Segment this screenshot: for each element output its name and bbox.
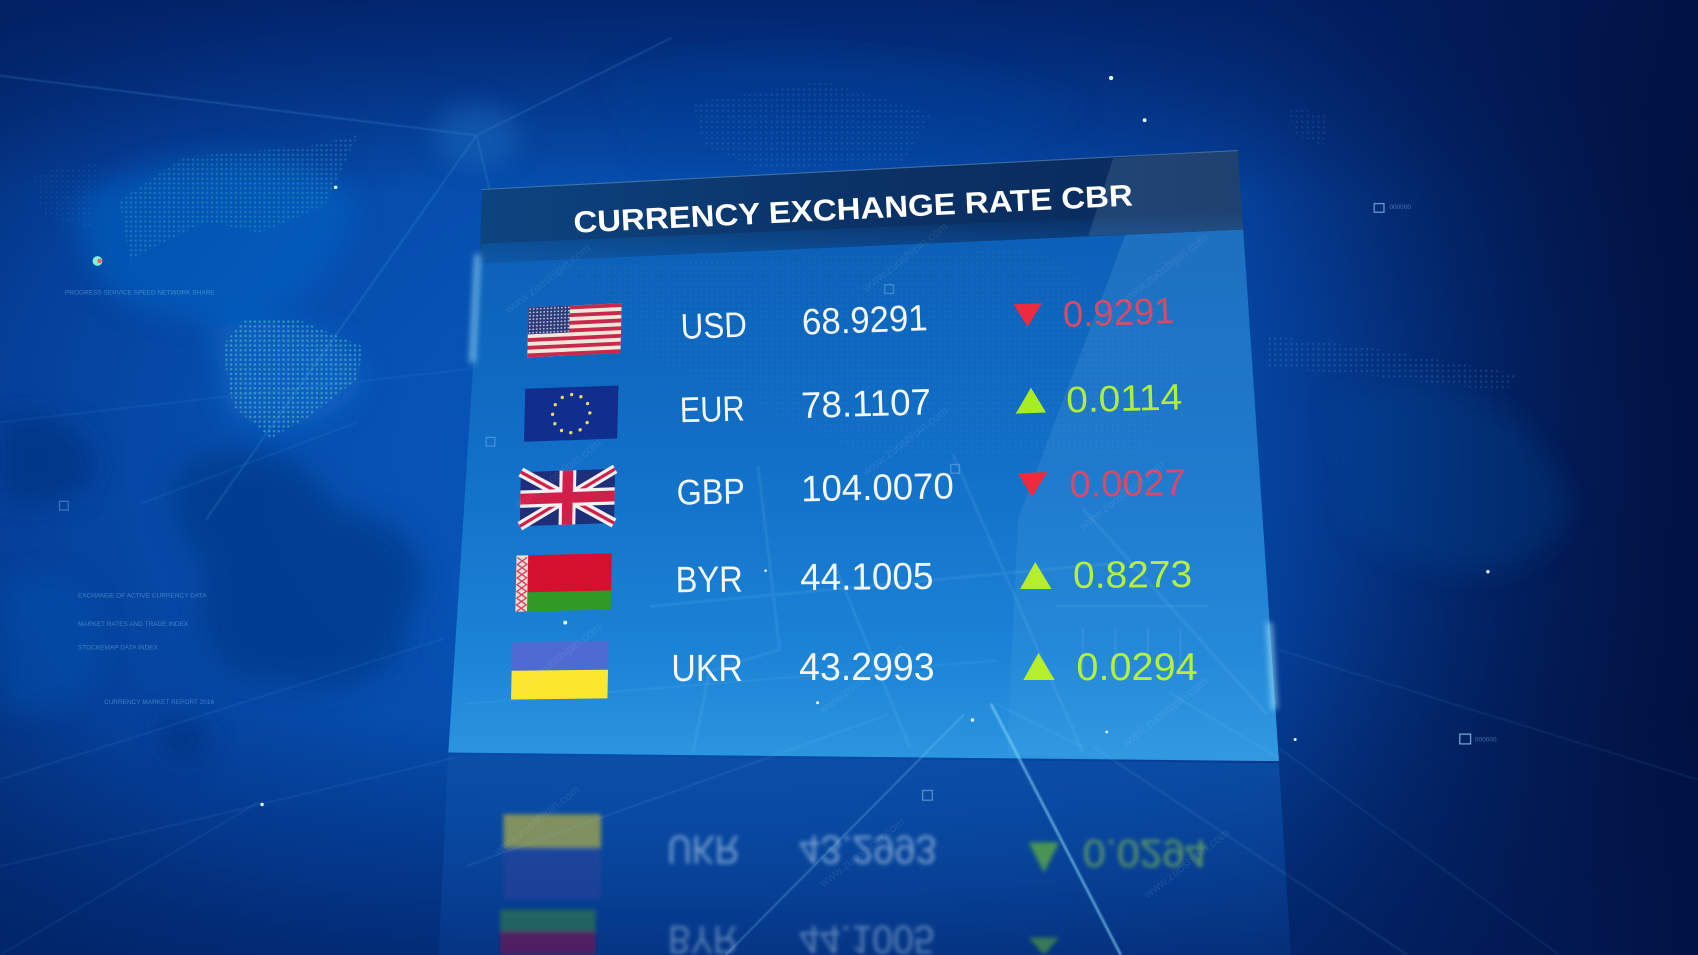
flag: EU: [524, 385, 618, 442]
panel left glow: [472, 254, 478, 363]
tiny data captions: 000000: [1389, 204, 1411, 211]
watermark: www.zuoshipin.com: [815, 815, 907, 891]
watermark: www.zuoshipin.com: [1119, 230, 1211, 306]
panel reflection: [439, 755, 1291, 955]
row: BYR: BYR: [675, 559, 743, 600]
row: BYR: [515, 553, 1192, 612]
world map silhouette: [0, 53, 1570, 763]
header band: [480, 151, 1243, 263]
row: USD: USD: [680, 305, 747, 347]
row: UKR: [511, 641, 1198, 699]
panel sheen: [1007, 230, 1279, 761]
arrow: up: [1016, 388, 1046, 414]
title: CURRENCY EXCHANGE RATE CBR: [573, 179, 1134, 240]
header top edge: [482, 151, 1238, 189]
arrow: down: [1018, 472, 1047, 497]
row: EUR: 0.0114: [1066, 376, 1183, 421]
flag: USA: [527, 303, 622, 357]
row: BYR: 0.8273: [1073, 554, 1192, 597]
tiny data captions: 000000: [1475, 737, 1497, 744]
tiny data captions: STOCKEMAP DATA INDEX: [78, 645, 159, 652]
row: EUR: EUR: [679, 388, 745, 430]
flag: Ukraine: [511, 641, 609, 699]
row: USD: 0.9291: [1062, 290, 1175, 335]
green marker light: [93, 256, 102, 266]
flag: Belarus: [515, 553, 612, 612]
reflection floor: [439, 755, 1291, 955]
row: GBP: GBP: [676, 471, 745, 513]
watermark: www.zuoshipin.com: [815, 642, 907, 718]
row: UKR: 43.2993: [799, 646, 935, 689]
watermark: [491, 219, 1232, 902]
row: GBP: 104.0070: [801, 465, 954, 509]
row: EUR: 78.1107: [800, 381, 931, 426]
watermark: www.zuoshipin.com: [859, 219, 951, 295]
arrow: up: [1023, 653, 1055, 680]
watermark: www.zuoshipin.com: [1119, 674, 1211, 750]
flare glow: [433, 103, 520, 168]
reflected row: BYR: [668, 917, 1059, 955]
watermark: www.zuoshipin.com: [1075, 457, 1167, 534]
sparkles: [260, 76, 1490, 806]
panel right glow: [1269, 623, 1275, 709]
header fade: [480, 212, 1243, 263]
reflected row: UKR: 0.0294: [1083, 831, 1207, 874]
watermark: www.zuoshipin.com: [512, 436, 604, 512]
floor perspective lines: [0, 704, 1408, 955]
panel dot map texture: [563, 249, 1191, 455]
row: USD: [527, 290, 1175, 357]
panel body: [448, 230, 1279, 761]
panel chart lines: [466, 455, 1279, 758]
watermark: www.zuoshipin.com: [501, 241, 593, 317]
tiny data captions: CURRENCY MARKET REPORT 2016: [104, 699, 215, 706]
data panel: [448, 151, 1279, 761]
row: BYR: 44.1005: [800, 556, 934, 599]
watermark: www.zuoshipin.com: [859, 403, 951, 479]
row: UKR: UKR: [671, 648, 743, 690]
watermark: www.zuoshipin.com: [512, 620, 604, 696]
row: USD: 68.9291: [801, 297, 928, 343]
arrow: down: [1014, 303, 1042, 327]
arrow: up: [1020, 562, 1052, 589]
row: EUR: [524, 376, 1183, 442]
watermark: www.zuoshipin.com: [491, 782, 582, 858]
tiny data captions: PROGRESS SERVICE SPEED NETWORK SHARE: [65, 290, 215, 297]
tiny data captions: EXCHANGE OF ACTIVE CURRENCY DATA: [78, 593, 207, 600]
reflected UKR flag: [504, 814, 601, 899]
row: UKR: 0.0294: [1076, 646, 1198, 689]
watermark: www.zuoshipin.com: [1140, 826, 1232, 902]
row: GBP: 0.0027: [1069, 462, 1186, 505]
map dot matrices: [32, 81, 1516, 439]
reflected row: UKR: 43.2993: [799, 827, 937, 871]
tiny data captions: [65, 204, 1497, 744]
header sheen: [1088, 151, 1243, 236]
reflected BYR flag: [500, 910, 596, 955]
data markers: [60, 204, 1471, 800]
reflected row: UKR: [667, 827, 1207, 874]
reflected row: UKR: UKR: [667, 827, 740, 871]
flag: UK: [520, 469, 615, 526]
tiny data captions: MARKET RATES AND TRADE INDEX: [78, 621, 189, 628]
row: GBP: [520, 462, 1186, 526]
